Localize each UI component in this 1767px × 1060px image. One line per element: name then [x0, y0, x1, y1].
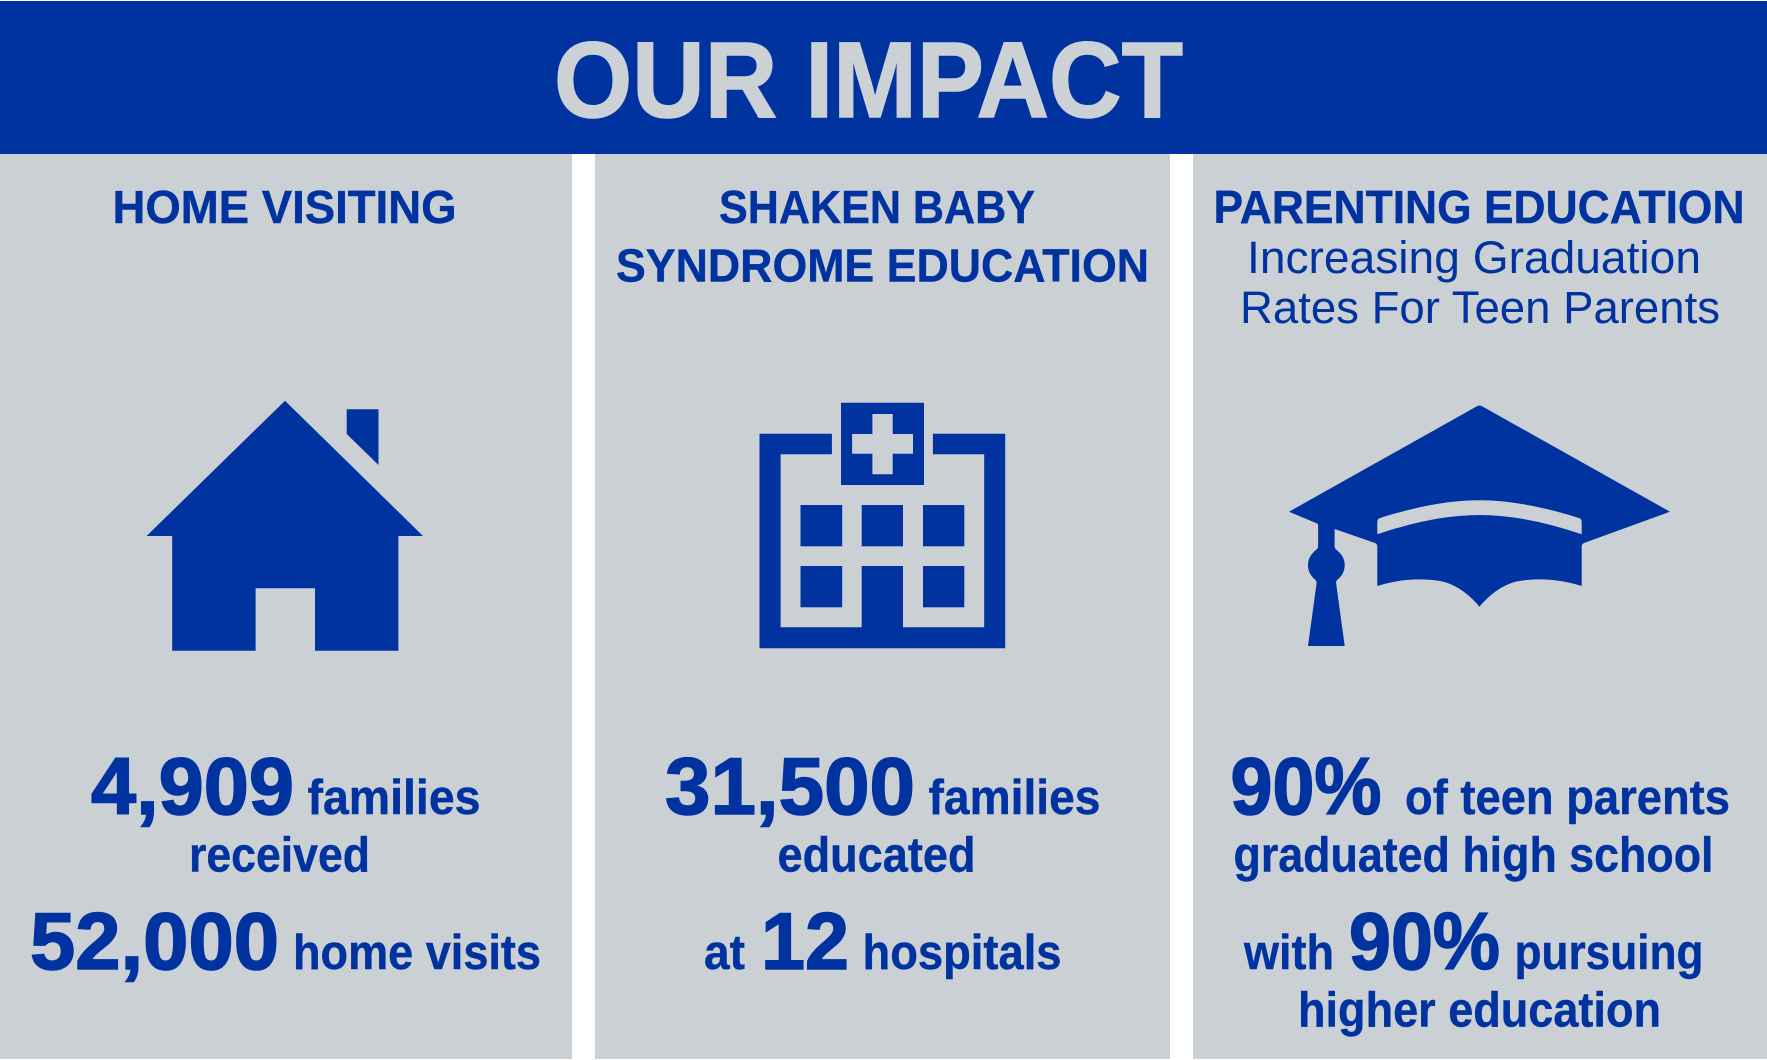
stat: families received	[91, 742, 480, 882]
heading: shaken baby syndrome education	[616, 181, 1149, 292]
icon: hospital	[760, 403, 1005, 648]
stat: teen parents graduated: graduated high school	[1234, 828, 1714, 882]
cap band highlight	[1377, 500, 1582, 534]
stat: families received: 4,909	[91, 742, 294, 832]
stat: home visits: home visits	[293, 926, 541, 980]
subheading: Rates For Teen Parents	[1240, 282, 1720, 333]
stat: pursuing higher education: 90%	[1349, 897, 1500, 987]
stat: teen parents graduated	[1230, 742, 1730, 882]
stat: pursuing higher education	[1243, 897, 1704, 1038]
heading: shaken baby syndrome education: SHAKEN BABY	[719, 181, 1035, 233]
stat: home visits	[30, 897, 541, 987]
title: OUR IMPACT	[554, 19, 1183, 140]
subheading: Increasing Graduation	[1247, 232, 1701, 283]
stat: families received: received	[189, 828, 370, 882]
stat: teen parents graduated: of teen parents	[1405, 771, 1730, 825]
panel background	[595, 154, 1170, 1059]
panel: shaken baby syndrome education	[595, 154, 1170, 1059]
panel background	[0, 154, 572, 1059]
stat: families educated: educated	[778, 828, 976, 882]
header banner	[0, 1, 1767, 154]
icon: graduation cap	[1289, 406, 1670, 646]
stat: pursuing higher education: higher education	[1298, 984, 1661, 1038]
subheading	[1240, 232, 1720, 333]
panel background	[1193, 154, 1767, 1059]
stat: families received: families	[308, 771, 480, 825]
stat: families educated: families	[928, 771, 1100, 825]
stat: hospitals: 12	[761, 897, 849, 987]
panel: parenting education	[1193, 154, 1767, 1059]
stat: home visits: 52,000	[30, 897, 279, 987]
heading: parenting education: PARENTING EDUCATION	[1214, 181, 1744, 233]
panel: home visiting	[0, 154, 572, 1059]
heading: shaken baby syndrome education: SYNDROME EDUCATION	[616, 240, 1149, 292]
stat: hospitals: at	[704, 926, 745, 980]
stat: pursuing higher education: with	[1243, 926, 1334, 980]
banner background	[0, 1, 1767, 154]
stat: families educated	[665, 742, 1100, 882]
stat: pursuing higher education: pursuing	[1514, 926, 1704, 980]
stat: hospitals: hospitals	[862, 926, 1062, 980]
heading: home visiting: HOME VISITING	[112, 181, 456, 233]
stat: teen parents graduated: 90%	[1230, 742, 1382, 832]
stat: families educated: 31,500	[665, 742, 915, 832]
stat: hospitals	[704, 897, 1062, 987]
icon: house	[147, 401, 423, 651]
